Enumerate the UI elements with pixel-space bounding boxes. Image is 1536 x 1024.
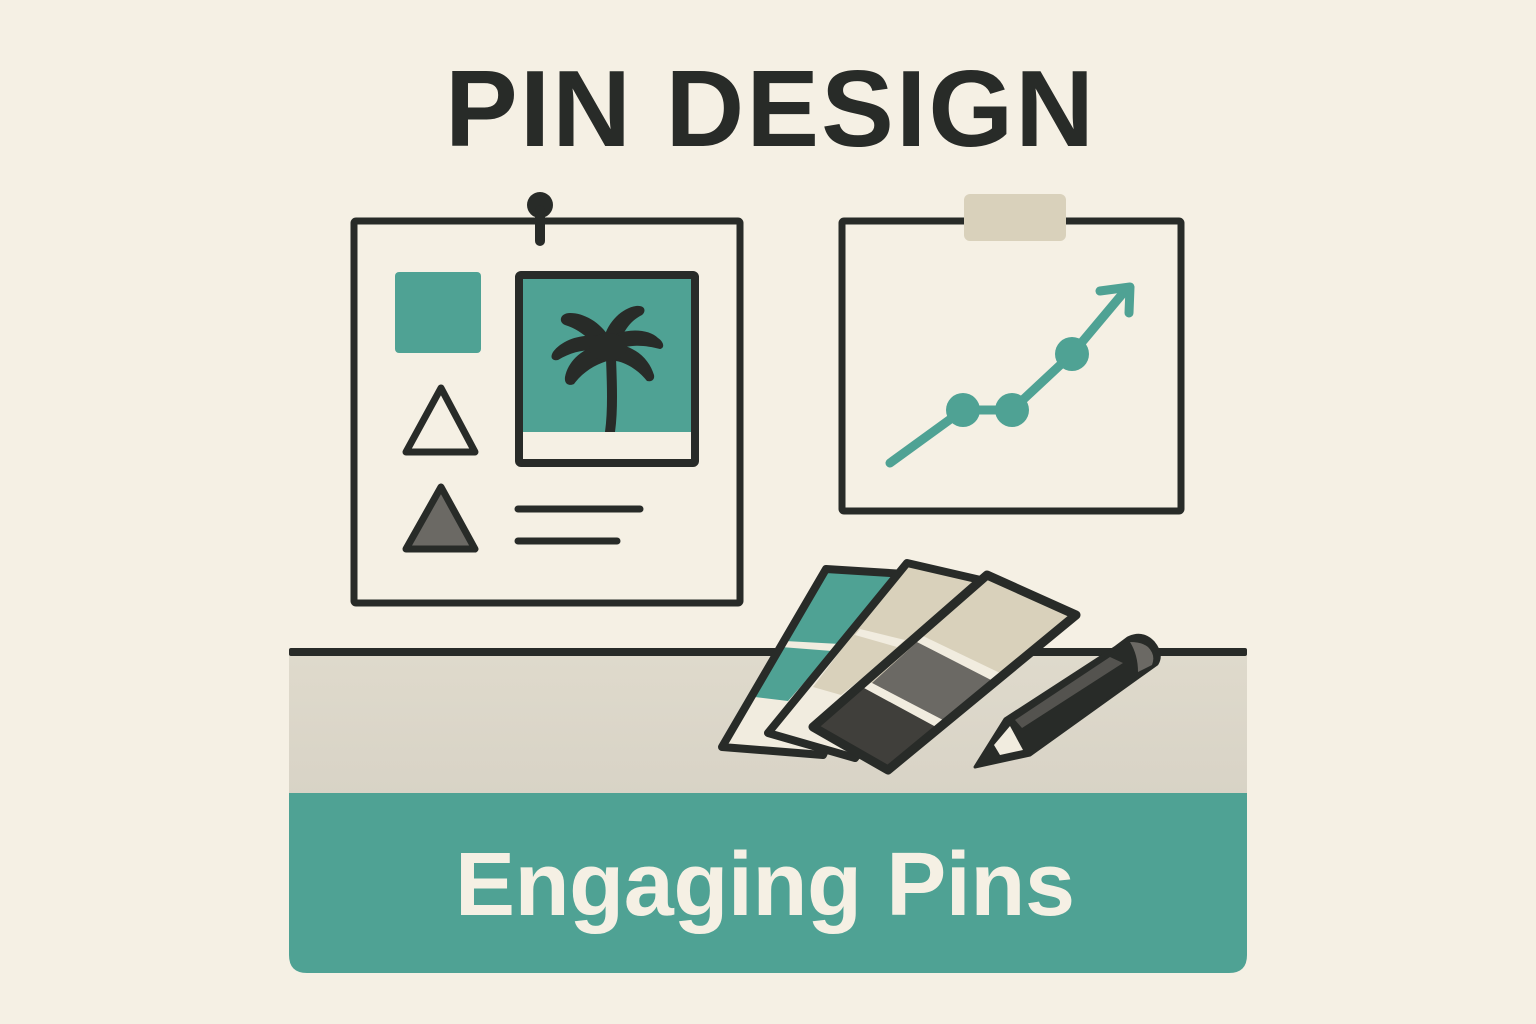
icon: palm tree bbox=[552, 306, 663, 432]
swatch: dark bbox=[813, 575, 1076, 770]
colour swatches bbox=[722, 563, 1076, 770]
teal square bbox=[395, 272, 481, 353]
panel: desk bbox=[289, 648, 1247, 797]
outline triangle bbox=[406, 388, 475, 452]
panel: pin design card bbox=[354, 192, 740, 603]
banner text: Engaging Pins bbox=[455, 835, 1075, 935]
icon: pencil bbox=[975, 635, 1159, 767]
tape bbox=[964, 194, 1066, 241]
image: palm tree photo bbox=[519, 275, 695, 463]
text lines bbox=[518, 509, 640, 541]
grey triangle bbox=[406, 487, 475, 549]
swatch: beige bbox=[768, 563, 985, 758]
line chart with arrow bbox=[890, 287, 1130, 463]
swatch: teal bbox=[722, 569, 905, 755]
title: PIN DESIGN bbox=[445, 48, 1094, 170]
panel: growth chart card bbox=[842, 194, 1181, 511]
icon: push pin bbox=[527, 192, 553, 246]
banner bbox=[289, 793, 1247, 973]
